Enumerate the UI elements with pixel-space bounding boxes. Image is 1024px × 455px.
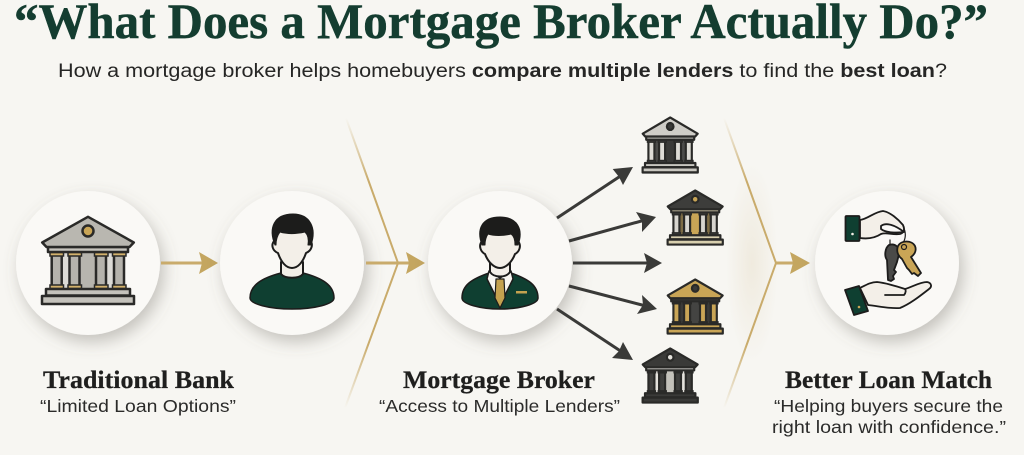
label: mortgage broker: “Access to Multiple Lenders” bbox=[379, 396, 620, 416]
label: traditional bank: “Limited Loan Options” bbox=[40, 396, 236, 416]
panel: homebuyer circle bbox=[220, 191, 364, 335]
divider chevron: before result bbox=[724, 118, 778, 408]
arrow: buyer to broker bbox=[366, 252, 425, 274]
icon: homebuyer bbox=[250, 214, 334, 309]
label: better loan match bbox=[772, 367, 1006, 437]
subtitle: How a mortgage broker helps homebuyers compare multiple lenders to find the best loan ? bbox=[58, 61, 947, 82]
label: better loan match: Better Loan Match bbox=[785, 367, 992, 394]
label: better loan match: right loan with confidence.” bbox=[772, 417, 1006, 437]
icon: lender bank 3 (gold) bbox=[668, 279, 723, 334]
panel: better loan match circle bbox=[815, 191, 959, 335]
panel: traditional bank circle bbox=[16, 191, 160, 335]
arrows: broker to lenders bbox=[557, 167, 662, 360]
label: better loan match: “Helping buyers secure the bbox=[774, 396, 1003, 416]
icon: lender bank 1 (grey) bbox=[643, 118, 698, 172]
icon: traditional bank bbox=[42, 217, 134, 304]
icon: lender bank 4 (dark) bbox=[643, 348, 698, 403]
arrow: bank to buyer bbox=[161, 252, 218, 274]
label: mortgage broker bbox=[379, 367, 620, 416]
label: traditional bank bbox=[40, 367, 236, 416]
icon: hands exchanging keys bbox=[845, 211, 931, 315]
label: mortgage broker: Mortgage Broker bbox=[403, 367, 595, 394]
icon: lender bank 2 (dark with gold door) bbox=[668, 190, 723, 245]
panel: mortgage broker circle bbox=[428, 191, 572, 335]
icon: broker in suit bbox=[462, 217, 538, 309]
arrow: broker to result bbox=[776, 252, 810, 274]
divider chevron: before broker bbox=[345, 118, 398, 408]
label: traditional bank: Traditional Bank bbox=[43, 367, 234, 394]
